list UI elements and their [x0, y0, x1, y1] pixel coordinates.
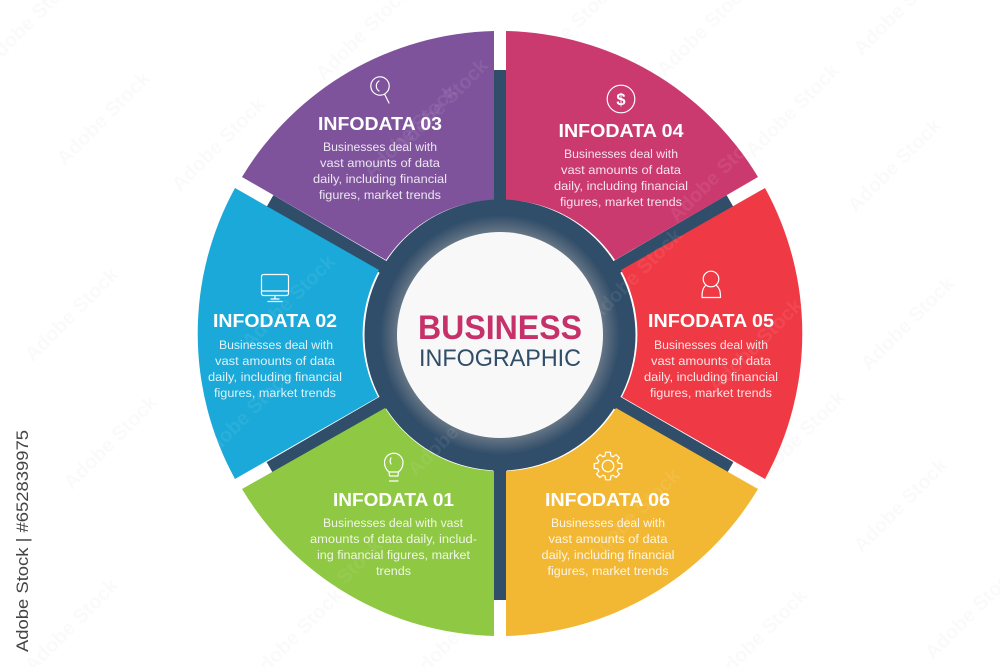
watermark on background: Adobe Stock: [844, 114, 946, 217]
body text: vast amounts of data: [651, 354, 771, 368]
body text: figures, market trends: [650, 386, 772, 400]
heading: INFODATA 04: [558, 120, 684, 141]
body text: vast amounts of data: [548, 532, 668, 546]
panel: infodata 02: [198, 188, 379, 479]
watermark on background: Adobe Stock: [21, 263, 123, 366]
icon: magnifier: [371, 77, 389, 103]
hub: dark ring: [364, 200, 636, 470]
body text: [554, 147, 688, 209]
watermark on panels: [195, 54, 807, 637]
panel: infodata 03: [242, 31, 494, 260]
heading: INFODATA 01: [333, 489, 454, 510]
watermark on panels: Adobe Stock: [404, 378, 506, 481]
heading: INFODATA 06: [545, 489, 670, 510]
watermark on panels: Adobe Stock: [391, 54, 493, 157]
stock id caption: Adobe Stock | #652839975: [14, 430, 32, 652]
body text: daily, including financial: [542, 548, 674, 562]
panel: infodata 04: [506, 31, 758, 260]
panel: infodata 06: [506, 408, 758, 636]
center hub: [364, 200, 636, 470]
segment: magenta: [506, 31, 758, 260]
body text: vast amounts of data: [561, 163, 681, 177]
watermark on background: Adobe Stock: [53, 67, 155, 170]
body text: Businesses deal with: [564, 147, 678, 161]
watermark on panels: Adobe Stock: [705, 294, 807, 397]
watermark on panels: Adobe Stock: [285, 534, 387, 637]
body text: amounts of data daily, includ-: [310, 532, 477, 546]
body text: figures, market trends: [560, 195, 682, 209]
body text: Businesses deal with: [219, 338, 333, 352]
icon: dollar coin: $: [616, 91, 626, 109]
body text: figures, market trends: [214, 386, 336, 400]
segment: red: [621, 188, 802, 479]
body text: figures, market trends: [319, 188, 441, 202]
watermark on background: Adobe Stock: [857, 272, 959, 375]
body text: figures, market trends: [548, 564, 668, 578]
body text: [542, 516, 674, 578]
icon: gear: [594, 452, 622, 480]
watermark on panels: Adobe Stock: [585, 224, 687, 327]
icon: person: [702, 271, 720, 298]
body text: Businesses deal with: [551, 516, 665, 530]
spokes: [270, 70, 730, 600]
panel: infodata 01: [242, 408, 494, 636]
body text: [310, 516, 477, 578]
icon: monitor: [262, 274, 288, 302]
watermark on background: Adobe Stock: [850, 454, 952, 557]
heading: INFODATA 03: [318, 113, 442, 134]
watermark on panels: Adobe Stock: [665, 124, 767, 227]
body text: trends: [376, 564, 411, 578]
body text: Businesses deal with: [323, 140, 437, 154]
watermark on background: Adobe Stock: [60, 391, 162, 494]
body text: Businesses deal with vast: [323, 516, 464, 530]
segment: purple: [242, 31, 494, 260]
segment: blue: [198, 188, 379, 479]
watermark on panels: Adobe Stock: [360, 80, 462, 183]
segment: orange: [506, 408, 758, 636]
panel: infodata 05: [621, 188, 802, 479]
body text: [208, 338, 342, 400]
body text: daily, including financial: [644, 370, 778, 384]
body text: Businesses deal with: [654, 338, 768, 352]
body text: vast amounts of data: [320, 156, 440, 170]
hub: white disc: [397, 232, 603, 438]
title: business: BUSINESS: [418, 309, 582, 347]
body text: daily, including financial: [554, 179, 688, 193]
body text: vast amounts of data: [215, 354, 335, 368]
icon: dollar coin: [607, 85, 635, 113]
body text: [313, 140, 447, 202]
watermark on panels: Adobe Stock: [583, 464, 685, 567]
watermark on panels: Adobe Stock: [238, 250, 340, 353]
watermark on background: Adobe Stock: [168, 93, 270, 196]
body text: daily, including financial: [313, 172, 447, 186]
body text: ing financial figures, market: [317, 548, 471, 562]
heading: INFODATA 02: [213, 310, 337, 331]
heading: INFODATA 05: [648, 310, 774, 331]
icon: light bulb: [384, 453, 403, 481]
watermark on background: Adobe Stock: [742, 59, 844, 162]
subtitle: infographic: INFOGRAPHIC: [419, 345, 581, 372]
body text: [644, 338, 778, 400]
body text: daily, including financial: [208, 370, 342, 384]
hub: inner glow: [380, 215, 620, 455]
watermark on panels: Adobe Stock: [195, 364, 297, 467]
segment: green: [242, 408, 494, 636]
watermark on background: Adobe Stock: [748, 386, 850, 489]
